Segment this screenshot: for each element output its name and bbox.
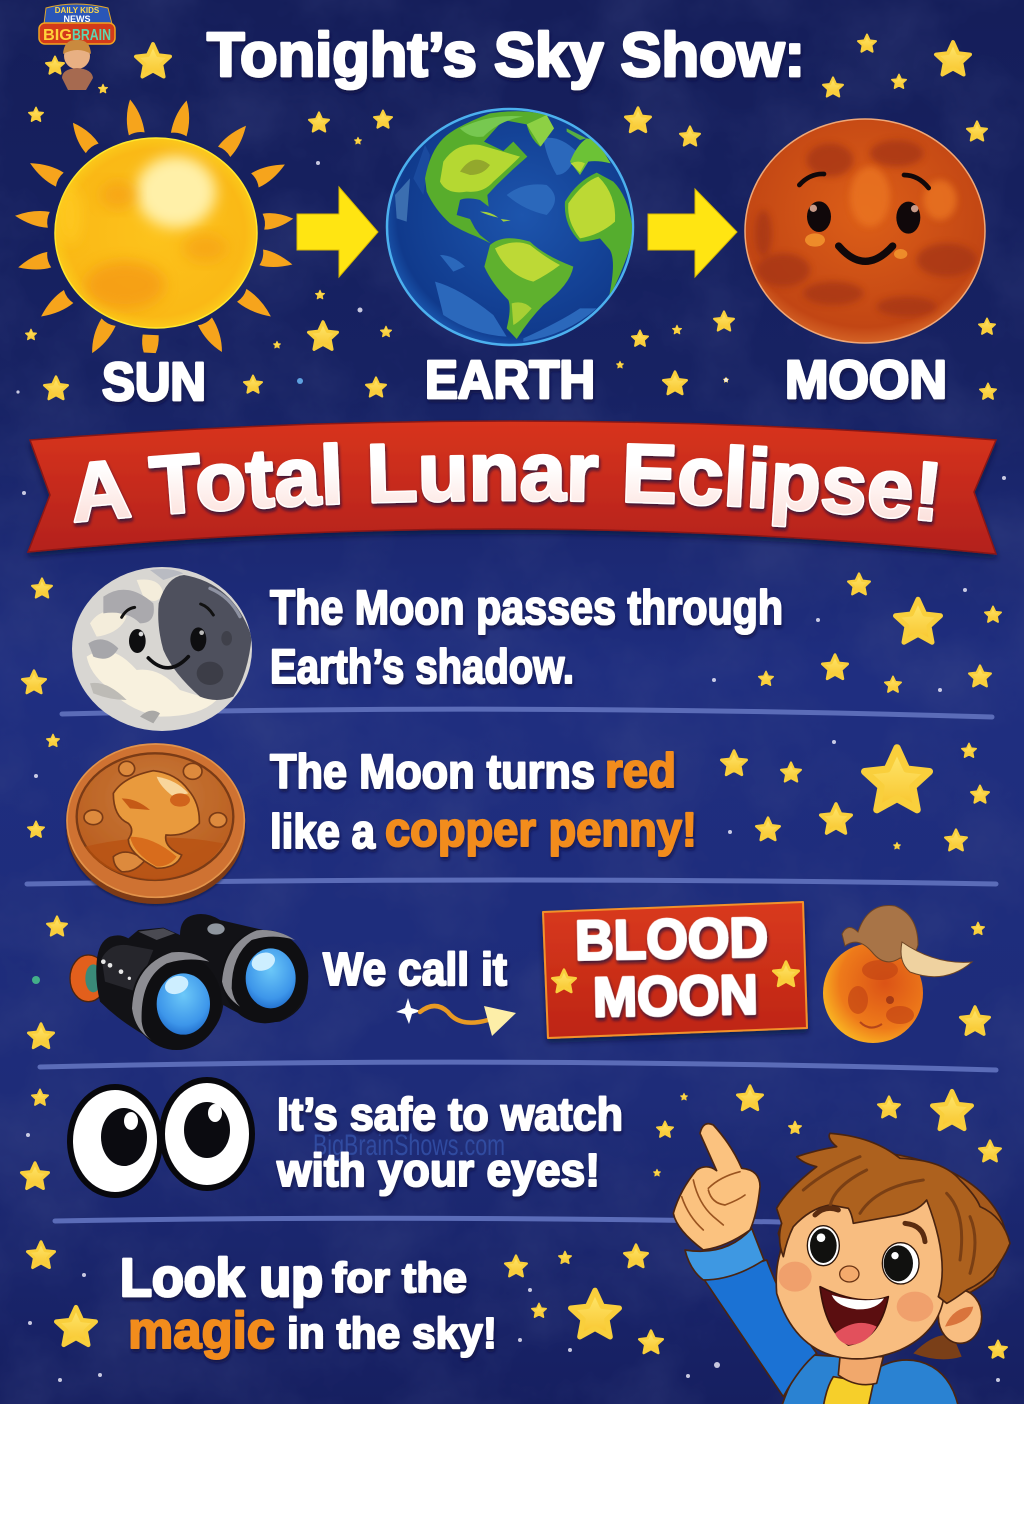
text: The Moon turns red like a copper penny <box>270 745 697 859</box>
text: It's safe to watch with your eyes: with your eyes! <box>276 1144 600 1196</box>
north america <box>425 111 554 243</box>
moon surface patches <box>87 569 217 723</box>
text: It's safe to watch with your eyes <box>276 1088 623 1196</box>
logo: Daily Kids News Big Brain: BIG <box>43 27 72 44</box>
badge: Blood Moon <box>543 902 807 1038</box>
text: It's safe to watch with your eyes: It’s safe to watch <box>277 1088 623 1140</box>
text: Look up for the magic in the sky: for the <box>332 1254 467 1301</box>
africa <box>565 173 633 300</box>
face <box>122 604 213 668</box>
text: We call it: We call it <box>323 943 507 995</box>
sun rays <box>14 98 294 357</box>
icon: blood moon with hat <box>823 906 972 1043</box>
badge: Blood Moon: MOON <box>592 962 758 1028</box>
watermark: BigBrainShows.com <box>313 1129 505 1162</box>
body <box>96 914 308 1047</box>
badge: Blood Moon: BLOOD <box>574 905 769 972</box>
text: The Moon passes through Earth's shadow: The Moon passes through <box>270 582 783 635</box>
hair back <box>778 1150 1005 1303</box>
text: Look up for the magic in the sky: in the sky! <box>287 1309 497 1358</box>
sun <box>14 98 294 357</box>
mouth <box>820 1287 888 1345</box>
raised arm <box>685 1228 817 1397</box>
shadow over moon <box>158 575 252 700</box>
eyes <box>807 201 920 234</box>
icon: copper penny <box>66 744 245 904</box>
text: The Moon passes through Earth's shadow <box>270 582 783 694</box>
icon: pair of cartoon eyes <box>70 1080 252 1195</box>
logo: Daily Kids News Big Brain <box>39 4 115 90</box>
body studs <box>101 959 131 980</box>
text: Look up for the magic in the sky <box>120 1248 497 1360</box>
text: The Moon turns red like a copper penny: red <box>605 745 676 798</box>
earth <box>387 109 633 345</box>
character: boy pointing up <box>673 1124 1010 1407</box>
dividers <box>27 709 996 1222</box>
penny central relief <box>113 771 199 868</box>
face <box>776 1198 944 1359</box>
label: SUN: SUN <box>102 352 206 412</box>
ocean shading <box>395 138 597 342</box>
text: Look up for the magic in the sky: magic <box>128 1302 275 1360</box>
label: EARTH: EARTH <box>425 350 595 410</box>
ear <box>938 1290 982 1343</box>
brows and smile <box>797 172 931 190</box>
shirt and neck <box>823 1357 883 1407</box>
title: Tonight’s Sky Show: <box>207 21 805 90</box>
arrow: earth to moon <box>648 189 737 277</box>
label: MOON: MOON <box>785 350 947 410</box>
text: The Moon passes through Earth's shadow: Earth’s shadow. <box>270 641 574 694</box>
arrow: wavy pointer to Blood Moon <box>396 998 516 1036</box>
sun disc <box>55 138 257 328</box>
text: The Moon turns red like a copper penny: like a <box>270 806 375 859</box>
cheeks <box>778 1262 933 1322</box>
text: The Moon turns red like a copper penny: copper penny! <box>385 804 697 857</box>
text: Look up for the magic in the sky: Look up <box>120 1248 323 1308</box>
moon with smiling face <box>745 119 985 343</box>
nape hair <box>913 1335 962 1359</box>
banner: A Total Lunar Eclipse: A Total Lunar Eclipse! <box>72 442 941 533</box>
cheeks <box>805 233 907 259</box>
logo: Daily Kids News Big Brain: BRAIN <box>72 27 111 44</box>
nose <box>840 1266 859 1282</box>
right barrel <box>222 930 308 1023</box>
left barrel <box>132 953 222 1050</box>
logo: Daily Kids News Big Brain: NEWS <box>64 14 90 24</box>
penny bumps <box>84 761 227 872</box>
icon: binoculars <box>70 914 308 1050</box>
hand pointing <box>673 1124 760 1250</box>
text: The Moon turns red like a copper penny: The Moon turns <box>270 746 595 799</box>
south america <box>484 238 573 339</box>
jacket <box>782 1355 958 1407</box>
eyes <box>807 1208 925 1284</box>
logo: Daily Kids News Big Brain: DAILY KIDS <box>55 6 100 15</box>
arrow: sun to earth <box>297 187 378 277</box>
strap ring <box>70 955 107 1002</box>
lunar surface mottling <box>755 140 977 317</box>
icon: partly shadowed moon <box>72 567 252 731</box>
europe <box>570 138 611 175</box>
hair fringe <box>777 1133 1010 1303</box>
